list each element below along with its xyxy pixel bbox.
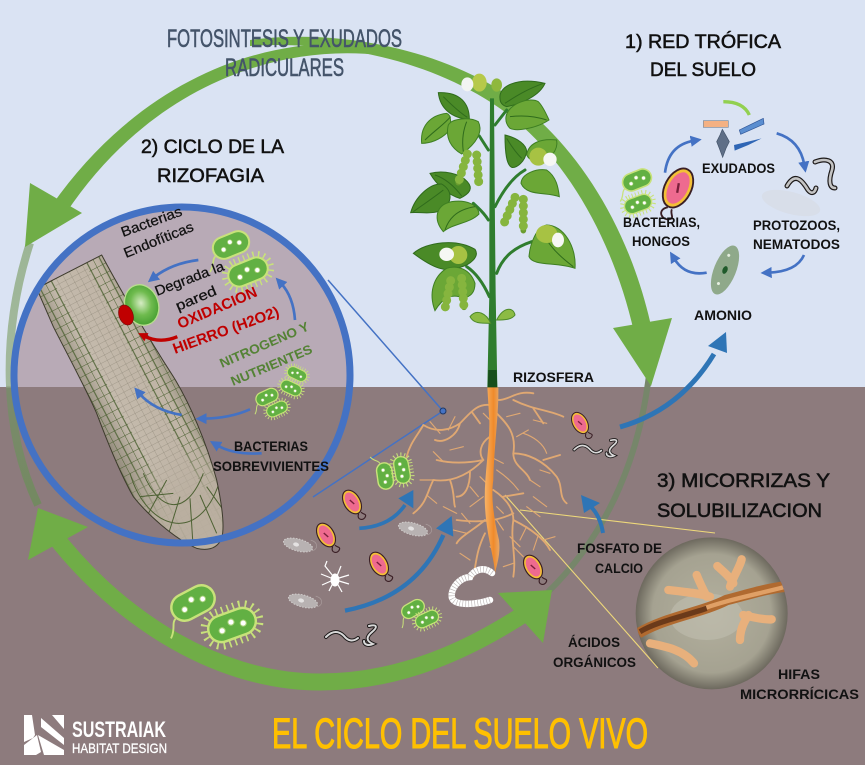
red arrow <box>144 336 177 340</box>
mycorrhiza labels: ORGÁNICOS <box>553 655 636 670</box>
heading: fotosintesis y exudados radiculares: FOTOSINTESIS Y EXUDADOS <box>167 25 402 53</box>
endophytic bacteria <box>199 228 273 292</box>
mite <box>321 561 349 592</box>
plant <box>411 74 575 388</box>
logo wordmark <box>72 717 167 756</box>
soil background <box>0 387 865 765</box>
blue flow arrows <box>139 260 295 454</box>
nematodes <box>787 160 835 193</box>
lens labels: OXIDACION <box>175 284 260 333</box>
mycorrhiza labels: CALCIO <box>595 561 643 576</box>
nutrient bacteria <box>248 364 310 420</box>
mycorrhiza labels: HIFAS <box>778 667 820 682</box>
soil organisms <box>155 409 617 648</box>
mycorrhiza labels: MICRORRÍCICAS <box>740 687 859 702</box>
lens ring <box>14 207 350 543</box>
lens labels: HIERRO (H2O2) <box>171 303 282 358</box>
bacteria and fungi <box>612 163 699 224</box>
lens labels <box>119 203 329 474</box>
roots <box>407 387 567 577</box>
heading: fotosintesis y exudados radiculares: RADICULARES <box>225 54 344 82</box>
heading: fotosintesis y exudados radiculares <box>167 25 402 82</box>
protozoa <box>282 517 433 612</box>
mycorrhiza labels: ÁCIDOS <box>568 635 620 650</box>
heading: red trofica del suelo: 1) RED TRÓFICA <box>625 31 781 53</box>
exudate molecules <box>703 102 764 157</box>
food web labels <box>623 161 840 323</box>
lens labels: SOBREVIVIENTES <box>213 458 329 474</box>
lens labels: BACTERIAS <box>234 438 308 454</box>
food web labels: AMONIO <box>694 308 752 323</box>
food web labels: PROTOZOOS, <box>753 218 840 233</box>
food web labels: EXUDADOS <box>702 161 775 176</box>
heading: red trofica del suelo <box>625 31 781 81</box>
large soil bacteria <box>155 581 262 648</box>
mycorrhiza labels <box>553 541 859 702</box>
heading: ciclo de la rizofagia <box>141 137 284 187</box>
logo wordmark: SUSTRAIAK <box>72 717 166 742</box>
heading: ciclo de la rizofagia: 2) CICLO DE LA <box>141 137 284 158</box>
zoom connector lines <box>313 280 446 497</box>
panel: ciclo de la rizofagia <box>10 204 354 550</box>
earthworm <box>452 569 492 604</box>
nematodes <box>326 440 617 645</box>
infected cell <box>119 280 164 330</box>
arrow from fosfato <box>581 495 603 533</box>
food web arrows <box>665 133 804 273</box>
heading: micorrizas y solubilizacion <box>657 471 830 522</box>
lens labels: NITROGENO Y <box>217 319 312 371</box>
lens labels: Degrada la <box>152 258 226 299</box>
food web labels: BACTERIAS, <box>623 215 700 230</box>
food web labels: HONGOS <box>632 234 690 249</box>
arrow to amonio <box>620 332 727 427</box>
photo: mycorrhizal hyphae <box>636 537 788 689</box>
sky background <box>0 0 865 387</box>
pink bacteria <box>313 409 595 589</box>
lens labels: Bacterias <box>119 203 184 240</box>
lens labels: Endofíticas <box>121 218 196 261</box>
title: EL CICLO DEL SUELO VIVO <box>272 710 648 758</box>
lens labels: pared <box>173 282 219 314</box>
heading: micorrizas y solubilizacion: 3) MICORRIZAS Y <box>657 471 830 492</box>
yellow pointer lines <box>505 495 715 668</box>
root tip micrograph <box>38 254 296 550</box>
logo mark <box>24 715 64 755</box>
heading: ciclo de la rizofagia: RIZOFAGIA <box>157 166 264 187</box>
soil blue arrows <box>345 490 453 611</box>
panel: food web <box>612 102 840 323</box>
green cycle arrows <box>10 37 672 682</box>
faint protozoan <box>759 185 823 221</box>
heading: micorrizas y solubilizacion: SOLUBILIZACION <box>657 501 822 522</box>
lens sky tint <box>18 210 346 387</box>
label: rizosfera: RIZOSFERA <box>513 369 594 385</box>
paramecium <box>705 242 745 298</box>
food web labels: NEMATODOS <box>753 237 840 252</box>
logo wordmark: HABITAT DESIGN <box>72 741 167 756</box>
bacteria near the roots <box>370 454 413 491</box>
lower bacteria <box>393 597 442 631</box>
mycorrhiza labels: FOSFATO DE <box>577 541 662 556</box>
iron oxidation spot <box>116 303 136 327</box>
lens labels: NUTRIENTES <box>228 341 315 389</box>
heading: red trofica del suelo: DEL SUELO <box>650 60 756 81</box>
logo: sustraiak habitat design <box>24 715 167 756</box>
